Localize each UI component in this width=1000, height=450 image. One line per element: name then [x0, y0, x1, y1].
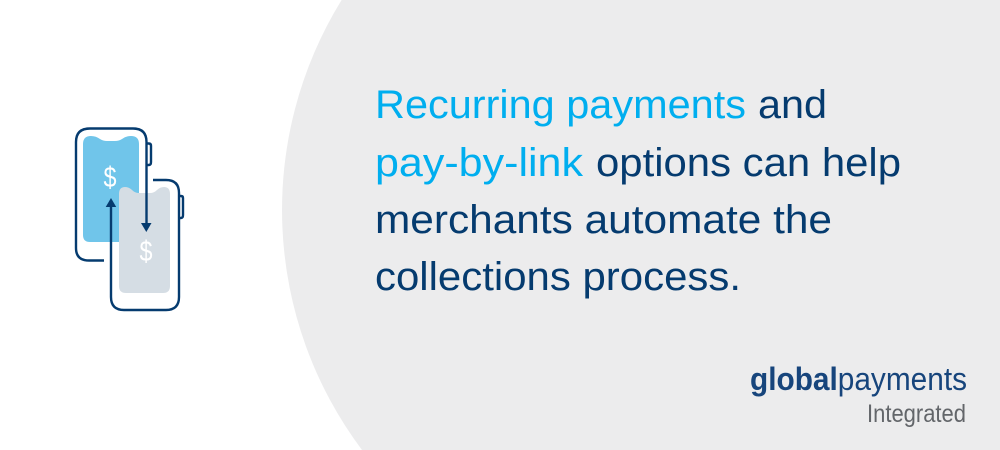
background circle panel: [282, 0, 1000, 450]
blue phone screen: [83, 136, 139, 242]
logo wordmark: globalpayments: [750, 361, 967, 397]
grey phone outline: [111, 180, 183, 310]
blue phone outline: [76, 128, 151, 260]
line 4: collections process.: [375, 255, 741, 299]
line 1: and: [758, 83, 827, 127]
line 2: pay-by-link: [375, 141, 584, 185]
arrow up: [106, 198, 116, 207]
logo: global payments Integrated: [750, 361, 967, 428]
dollar sign bottom: $: [140, 236, 152, 268]
arrow down: [141, 223, 152, 232]
line 3: merchants automate the: [375, 198, 832, 242]
line 2: options can help: [596, 141, 901, 185]
headline text: [375, 83, 901, 299]
line 1: Recurring payments: [375, 83, 746, 127]
dollar sign top: $: [104, 162, 116, 194]
grey phone screen: [119, 187, 170, 293]
line 2: [375, 141, 901, 185]
logo subline: Integrated: [867, 400, 966, 428]
icon: two phones exchanging payment: [76, 128, 183, 310]
